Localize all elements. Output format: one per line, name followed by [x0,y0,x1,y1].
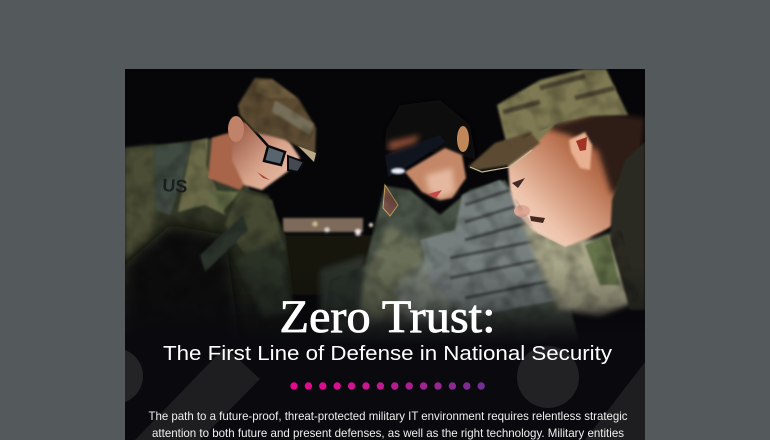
name tape letters: US [162,175,188,197]
dark fade over photo [125,265,645,345]
glasses [243,118,304,172]
decorative circle right [517,346,579,408]
hair [385,100,476,160]
lips [428,190,442,198]
ear [569,132,592,170]
infographic card [87,69,645,440]
uniform centre [320,180,580,345]
mouth [257,172,270,180]
soldier left [125,78,316,345]
face [405,148,466,200]
soldier centre [318,126,576,336]
intro paragraph: attention to both future and present defenses, as well as the right technology. Military entities [152,426,624,440]
camouflage mottling [125,69,632,318]
decorative diagonal band right [585,362,645,440]
vest [420,180,558,318]
intro paragraph: The path to a future-proof, threat-protected military IT environment requires relentless strategic [148,409,628,423]
ear [457,126,469,152]
headlamp [385,135,445,177]
distant lit building [283,218,383,295]
soldier right [468,69,645,315]
decorative circle left [125,350,143,402]
camo collar [522,219,640,315]
face [232,118,300,190]
flag patch [383,185,398,216]
cap [468,69,628,172]
subtitle: The First Line of Defense in National Security [163,343,612,365]
dotted divider [290,382,485,390]
neck [208,132,250,190]
photo: soldiers at night [125,69,645,345]
right shoulder [610,142,645,310]
decorative diagonal band left [135,347,260,440]
title: Zero Trust: [280,291,496,343]
ear [228,116,244,142]
cap [238,78,316,162]
eye, nose, moustache [512,178,525,188]
uniform left [125,135,292,314]
intro paragraph [148,409,628,440]
neck/head [506,116,616,248]
